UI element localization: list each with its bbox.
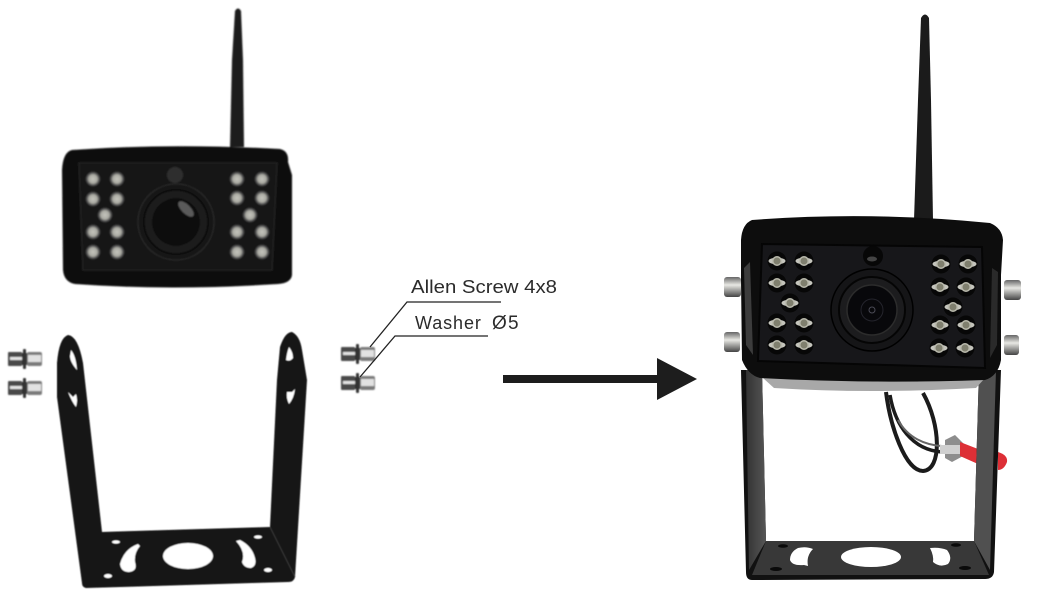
side bolts [724,277,1021,355]
antenna [230,8,244,147]
assembled bracket [741,370,1001,580]
infrared sensor [167,167,183,183]
left wireless camera [62,8,292,288]
camera front panel [79,163,277,270]
lens [138,184,214,260]
front panel [758,244,985,368]
assembled antenna [914,14,933,220]
camera housing [741,216,1003,382]
cable connector [940,435,1007,470]
U bracket [57,332,307,588]
housing side edges [744,262,998,358]
label: Washer: 5 [508,313,519,334]
LEDs [86,172,270,260]
leader lines [360,302,501,377]
assembled lens [831,269,913,351]
cable loop [886,392,942,471]
label: Washer: Ø [492,313,507,334]
camera body [62,146,292,288]
silver strip [763,378,985,391]
assembled LEDs [768,252,978,358]
sensor [863,246,883,266]
label: Allen Screw: Allen Screw 4x8 [411,277,557,297]
left screws [8,349,42,398]
label: Washer: Washer [415,313,482,333]
right screws [341,344,375,393]
arrow [503,358,697,400]
assembled camera on bracket [724,14,1021,580]
